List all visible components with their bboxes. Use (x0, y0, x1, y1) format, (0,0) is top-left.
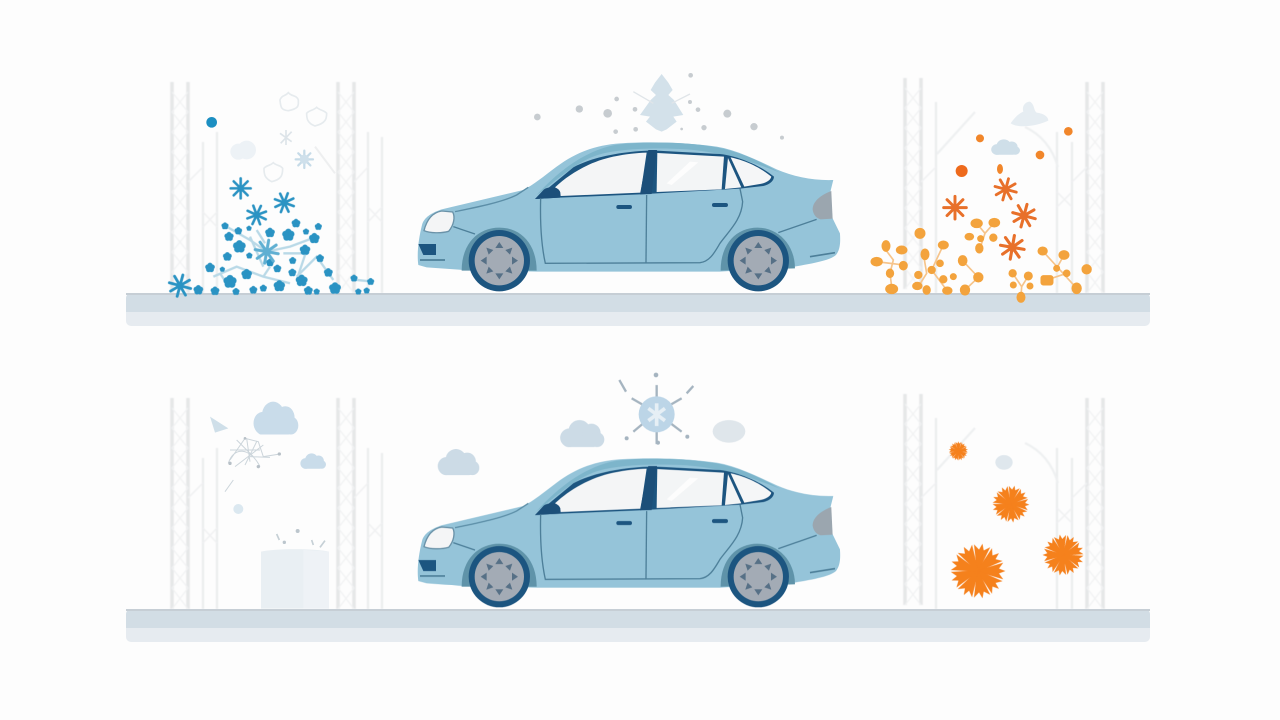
car: bottom (418, 458, 840, 607)
top snowflake with dots (534, 73, 784, 140)
car: top (418, 142, 840, 291)
orange bursts (944, 441, 1088, 604)
falling flakes: orange (871, 102, 1091, 302)
towers: top left (172, 82, 382, 293)
clouds and virus-like flake (438, 373, 745, 475)
road: top (126, 293, 1150, 326)
falling flakes: pale blue (206, 93, 335, 182)
pollution box and clouds (210, 402, 329, 609)
snow pile: blue flakes (167, 178, 374, 299)
orange leaf pile (871, 219, 1091, 302)
panel: top scene (126, 73, 1150, 326)
road: bottom (126, 609, 1150, 642)
panel: bottom scene (126, 373, 1150, 642)
towers: top right (905, 78, 1103, 293)
towers: bottom left (172, 398, 382, 609)
towers: bottom right (905, 394, 1103, 609)
